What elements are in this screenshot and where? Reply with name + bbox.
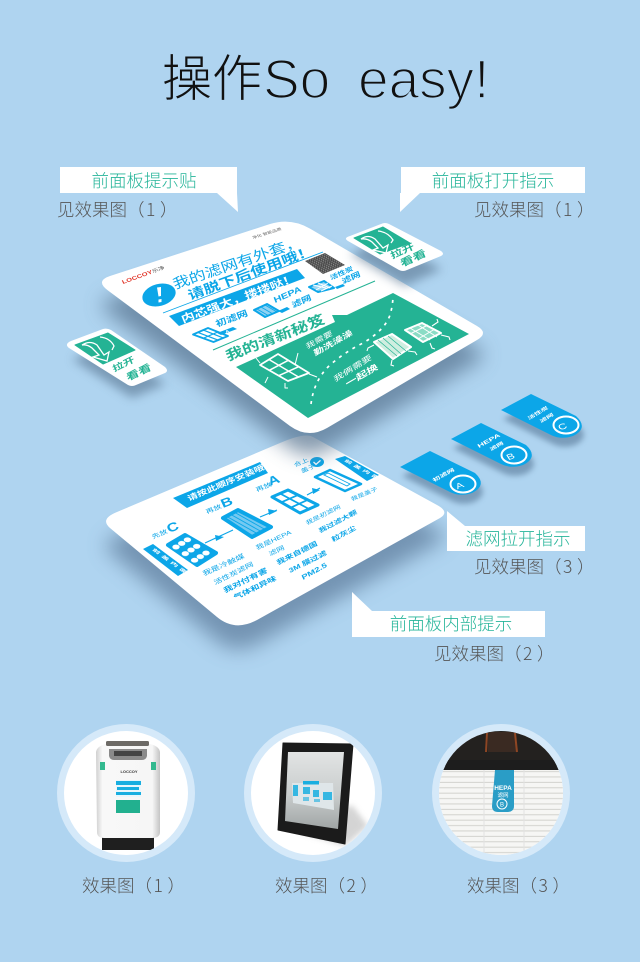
text: carbon filter description: 我是冷触媒 (201, 552, 246, 577)
tag: left pull to view (67, 329, 167, 398)
title (162, 39, 489, 111)
panel: front panel sticker (102, 222, 483, 455)
text: wash: 勤洗澡澡 (312, 327, 354, 357)
label: close lid (292, 456, 324, 474)
label: B step: 再放 (204, 503, 223, 515)
panel: front panel inner sticker (106, 435, 444, 649)
caption: effect 3: 效果图 (467, 873, 520, 898)
label: A step: A (266, 472, 282, 489)
label: close lid: 合上 (292, 456, 310, 468)
callout: front panel sticker: （ (127, 197, 144, 222)
caption: effect 1: 效果图 (82, 873, 134, 898)
text: carbon filter description: 气体和异味 (232, 574, 278, 601)
text: HEPA filter description: PM2.5 (300, 560, 329, 581)
photo: filter tab (432, 724, 570, 862)
callout: front panel opening: 见效果图 (474, 197, 544, 222)
photo: machine (57, 724, 195, 862)
caption: effect 1: ） (168, 873, 185, 898)
filter: carbon: 活性炭 (329, 265, 354, 282)
tag: left pull to view: 看看 (125, 361, 153, 383)
callout: inner panel: 前面板内部提示 (390, 611, 512, 636)
callout: front panel opening: 1 (563, 197, 572, 222)
icon: lid (315, 470, 361, 491)
text: wash: 我需要 (305, 329, 334, 350)
text: carbon filter description: 活性炭滤网 (212, 560, 255, 586)
label: close lid: 盖子 (299, 462, 317, 474)
callout: filter pull: 滤网拉开指示 (466, 526, 570, 551)
label: B step: B (219, 494, 235, 511)
filter: primary: A (224, 329, 231, 334)
logo: 乐净 (151, 264, 166, 275)
arrows between filters (205, 488, 320, 543)
tag: right inner cover: 前盖内面 (343, 458, 383, 482)
callout: front panel opening: 前面板打开指示 (432, 168, 554, 193)
text: HEPA filter description (254, 528, 329, 581)
tab: filter A (400, 451, 483, 504)
title: easy! (358, 48, 489, 110)
tab: filter C: C (557, 422, 569, 433)
small top note: 净化 智能品质 (251, 226, 283, 241)
text: HEPA filter description: 我来自德国 (275, 539, 319, 566)
tag: left inner cover: 前盖内面 (151, 547, 191, 577)
title: So (263, 48, 330, 110)
tag: right pull to view (346, 223, 443, 286)
label: C step: C (165, 519, 181, 536)
callout: filter pull: ） (577, 554, 594, 579)
icon: QR code (305, 253, 345, 274)
tag: right pull to view: 看看 (399, 247, 428, 269)
caption: effect 2: ） (360, 873, 378, 898)
photo: machine: LOCCOY (120, 769, 138, 774)
callout: inner panel: 见效果图 (434, 641, 504, 666)
callout: inner panel: （ (504, 641, 522, 666)
text: HEPA filter description: 滤网 (267, 544, 286, 557)
icon: HEPA character (367, 334, 417, 366)
callout: front panel opening: ） (577, 197, 594, 222)
heading: filter has a cover: 我的滤网有外套， (171, 234, 304, 292)
caption: effect 1: （ (134, 873, 152, 898)
callout: front panel sticker (57, 167, 238, 222)
logo: LOCCOY (121, 269, 154, 286)
text: HEPA filter description: 3M 膜过滤 (287, 548, 328, 574)
callout: front panel sticker: 1 (146, 197, 155, 222)
tag: right pull to view: 拉开 (389, 240, 416, 261)
filter: primary: 初滤网 (214, 307, 250, 329)
icon: grid filter (256, 353, 317, 388)
caption: effect 3: 3 (538, 873, 548, 898)
caption: effect 2: 效果图 (275, 873, 328, 898)
panel: fresh secret: 我的清新秘笈 (223, 311, 327, 364)
tab: filter A: A (454, 481, 466, 491)
tab: filter B: B (505, 452, 517, 462)
callout: filter pull: 3 (563, 554, 572, 579)
tab: filter A: 初滤网 (431, 466, 456, 483)
callout: filter pull: 见效果图 (474, 554, 544, 579)
icon: primary filter A (272, 490, 318, 513)
text: primary filter description: 我是初滤网 (304, 503, 342, 526)
text: carbon filter description (201, 552, 278, 601)
callout: front panel opening (400, 167, 594, 222)
logo (121, 264, 166, 286)
callout: filter pull: （ (544, 554, 562, 579)
photo: filter tab: 滤网 (497, 791, 509, 799)
caption: effect 1: 1 (154, 873, 163, 898)
icon: carbon filter C (168, 535, 216, 565)
label: C step (150, 519, 181, 540)
tag: left pull to view: 拉开 (111, 354, 136, 374)
label: C step: 先放 (150, 528, 169, 540)
icon: HEPA filter B (223, 510, 271, 537)
callout: front panel sticker: 前面板提示贴 (92, 168, 196, 193)
callout: front panel opening: （ (544, 197, 562, 222)
text: replace: 我俩需要 (332, 352, 373, 383)
filter: carbon: 滤网 (340, 269, 362, 286)
banner: strong core: 内芯强大，搂搂哒！ (179, 272, 298, 325)
text: primary filter description: 我过滤大颗 (317, 508, 359, 534)
heading: remove before use: 请脱下后使用哦！ (186, 243, 316, 303)
tab: filter B: HEPA (476, 432, 502, 449)
text: carbon filter description: 我对付有害 (222, 566, 269, 594)
caption: effect 2: 2 (346, 873, 356, 898)
install order banner: 请按此顺序安装哦 (186, 462, 266, 502)
callout: filter pull (447, 511, 594, 579)
callout: inner panel: 2 (523, 641, 532, 666)
icon: carbon character (405, 319, 450, 349)
tab: filter C: 活性炭 (526, 405, 549, 421)
text: lid description: 我是盖子 (350, 486, 379, 503)
text: replace: 一起换 (344, 361, 380, 389)
panel: fresh secret (223, 293, 469, 418)
text: primary filter description (304, 503, 359, 543)
caption: effect 3: ） (552, 873, 570, 898)
tab: filter B (451, 423, 534, 476)
caption: effect 3: （ (520, 873, 537, 898)
label: B step (204, 494, 235, 515)
photo: inner panel (244, 724, 382, 862)
callout: front panel sticker: 见效果图 (57, 197, 127, 222)
caption: effect 2: （ (328, 873, 345, 898)
filter: HEPA: 滤网 (290, 292, 313, 310)
tab: filter C (501, 394, 584, 447)
label: A step (254, 472, 282, 493)
title: 操作 (162, 39, 262, 111)
text: replace (332, 352, 380, 389)
photo: filter tab: B (500, 802, 504, 808)
callout: front panel sticker: ） (160, 197, 178, 222)
label: A step: 再放 (254, 481, 273, 493)
tab: filter B: 滤网 (488, 440, 505, 452)
filter: HEPA (254, 285, 313, 317)
photo: filter tab: HEPA (494, 785, 512, 792)
callout: inner panel (352, 592, 554, 666)
text: primary filter description: 粒灰尘 (330, 523, 357, 543)
tab: filter C: 滤网 (538, 412, 555, 424)
filter: carbon (309, 265, 362, 292)
text: HEPA filter description: 我是HEPA (254, 528, 293, 551)
icon: exclamation (140, 280, 178, 310)
dashed path (311, 295, 393, 404)
filter: HEPA: HEPA (273, 285, 303, 305)
callout: inner panel: ） (537, 641, 554, 666)
filter: primary (193, 307, 250, 342)
